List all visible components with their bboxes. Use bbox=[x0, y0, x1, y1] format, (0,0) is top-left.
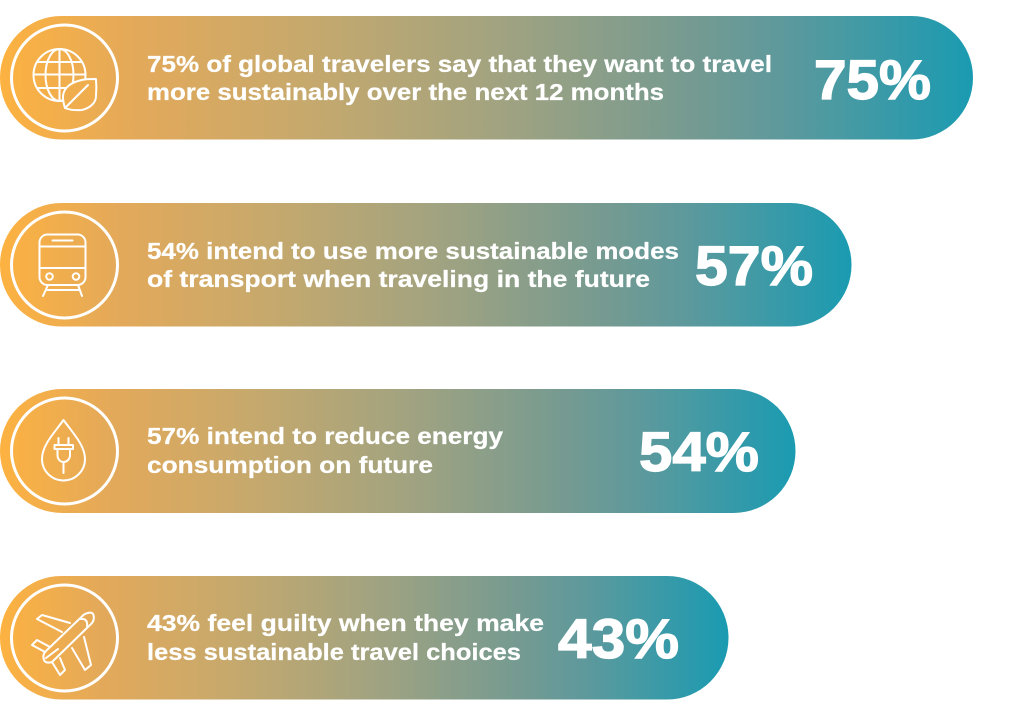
text: 75% description: more sustainably over the next 12 months bbox=[147, 79, 664, 105]
text: energy description: consumption on future bbox=[147, 452, 433, 478]
text: 75% description: 75% of global travelers say that they want to travel bbox=[147, 51, 772, 77]
panel: 57% sustainable transport bbox=[0, 203, 852, 326]
icon: airplane bbox=[12, 585, 118, 691]
stat: 54%: 54% bbox=[639, 420, 759, 483]
text: energy description: 57% intend to reduce energy bbox=[147, 423, 503, 449]
icon: train bbox=[12, 212, 118, 318]
text: transport description: 54% intend to use more sustainable modes bbox=[147, 238, 679, 264]
text: guilt description: 43% feel guilty when they make bbox=[147, 610, 544, 636]
bar background 3 bbox=[0, 389, 796, 513]
stat: 43%: 43% bbox=[558, 607, 679, 670]
text: guilt description: less sustainable travel choices bbox=[147, 639, 521, 665]
panel: 75% global travelers bbox=[0, 16, 973, 140]
text: transport description: of transport when traveling in the future bbox=[147, 266, 650, 292]
bar background 4 bbox=[0, 576, 728, 700]
stat: 75%: 75% bbox=[814, 48, 931, 111]
stat: 57%: 57% bbox=[695, 234, 813, 297]
panel: 54% reduce energy bbox=[0, 389, 796, 513]
icon: globe with leaf bbox=[12, 25, 118, 131]
bar background 1 bbox=[0, 16, 973, 140]
icon: energy drop with plug bbox=[12, 398, 118, 504]
bar background 2 bbox=[0, 203, 852, 326]
panel: 43% feel guilty bbox=[0, 576, 728, 700]
